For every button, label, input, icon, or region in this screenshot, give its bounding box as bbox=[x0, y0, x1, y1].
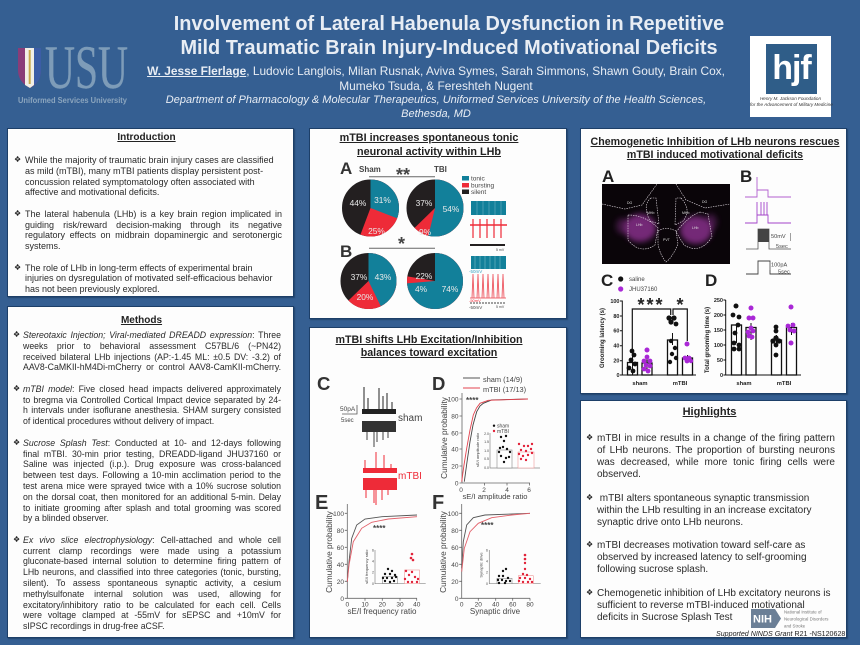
chart D: total grooming time bbox=[705, 298, 801, 387]
chart F inset: Synaptic drive bbox=[478, 552, 484, 578]
legend: silent bbox=[471, 189, 486, 196]
chart C: sham traces: 5sec bbox=[341, 418, 354, 424]
text: methods: silent). To assess spontaneous synaptic activity, a cesium bbox=[23, 578, 281, 588]
logo: NIH: and Stroke bbox=[784, 624, 806, 628]
pie percent labels: 37% bbox=[416, 198, 433, 208]
text: methods: Saline was injected (i.p.). Drug exposure was cross-balanced bbox=[23, 459, 281, 469]
bullets bbox=[586, 433, 593, 597]
chart D inset: 1.5 bbox=[484, 440, 489, 444]
pie percent labels: 25% bbox=[368, 226, 385, 236]
panel letter A: A bbox=[340, 159, 352, 178]
panel: chemogenetic inhibition bbox=[580, 128, 847, 394]
pie percent labels: 74% bbox=[442, 284, 459, 294]
grant note: Supported NINDS Grant R21 -NS120628. bbox=[716, 630, 847, 638]
pie percent labels: 37% bbox=[351, 272, 368, 282]
text: methods: received bilateral LHb injections (AP:-1.45 ML: ±0.5 DV: -3.2) of bbox=[23, 352, 281, 362]
chart F: synaptic drive: 20 bbox=[475, 602, 482, 608]
chart D: amplitude ratio: **** bbox=[466, 396, 479, 405]
text: methods: between test days. Following a 10-min acclimation period to the bbox=[23, 470, 281, 480]
text: methods: of identical procedures without delivery of impact. bbox=[23, 416, 214, 426]
chart D inset: 2.0 bbox=[484, 432, 489, 436]
chart C: grooming latency: sham bbox=[632, 381, 648, 387]
text: introduction bullets: as mild (mTBI), many mTBI patients display persistent post- bbox=[25, 166, 263, 176]
chart E: frequency ratio: sE/I frequency ratio bbox=[348, 607, 417, 616]
chart D: amplitude ratio: 60 bbox=[451, 430, 459, 438]
chart C: sham traces bbox=[340, 387, 422, 447]
chart D: amplitude ratio: Cumulative probability bbox=[439, 396, 449, 479]
text: highlights: Chemogenetic inhibition of LHb excitatory neurons is bbox=[597, 588, 830, 599]
text: methods: were voltage clamped at -55mV for sEPSC and +10mV for bbox=[23, 610, 281, 620]
pie percent labels: 31% bbox=[374, 195, 391, 205]
text: introduction bullets: regulatory effects on midbrain dopaminergic and serotonergic bbox=[25, 230, 282, 240]
text: methods: gluconate-based internal solution to determine firing pattern of bbox=[23, 556, 281, 566]
text: methods: sIPSC recordings in drug-free aCSF. bbox=[23, 621, 165, 631]
title bbox=[174, 13, 724, 59]
panel letters bbox=[601, 167, 752, 290]
chart F: synaptic drive: 80 bbox=[526, 602, 534, 608]
heading: spontaneous tonic activity: neuronal activity within LHb bbox=[357, 146, 501, 158]
text: introduction bullets: concussion related symptomatology often associated with bbox=[25, 176, 255, 186]
text: methods: mTBI model: Five closed head impacts delivered approximately bbox=[23, 384, 281, 394]
legend: tonic bbox=[471, 176, 485, 182]
chart D: total grooming time: 200 bbox=[714, 313, 723, 319]
micrograph: LHb bbox=[636, 223, 642, 227]
chart C: grooming latency: 80 bbox=[613, 314, 620, 320]
authors bbox=[147, 64, 725, 93]
text: methods: final mTBI. 30-min prior testing, DREADD-ligand JHU37160 or bbox=[23, 449, 281, 459]
micrograph: DG bbox=[627, 201, 633, 205]
text: highlights: synaptic drive onto LHb neurons. bbox=[597, 517, 743, 528]
text: introduction bullets: affective and motivational deficits. bbox=[25, 187, 159, 197]
micrograph: MHb bbox=[647, 211, 654, 215]
pie: B TBI bbox=[421, 267, 449, 295]
chart C: sham traces: 50pA bbox=[340, 406, 356, 413]
significance B: * bbox=[398, 234, 405, 254]
text: highlights: observed by increased latency to self-grooming bbox=[597, 552, 807, 563]
panel: spontaneous tonic activity bbox=[309, 128, 567, 319]
text: methods: weeks prior to behavioral assessment C57BL/6 (~PN42) bbox=[23, 341, 281, 351]
significance B bbox=[369, 234, 435, 254]
text: introduction bullets: While the majority of traumatic brain injury cases are classified bbox=[25, 155, 274, 165]
chart D inset: mTBI bbox=[497, 429, 509, 435]
chart E: frequency ratio: 0 bbox=[340, 596, 344, 603]
chart E inset: 6 bbox=[372, 548, 374, 552]
text: highlights bbox=[597, 433, 835, 623]
text: highlights: deficits in Sucrose Splash Test bbox=[597, 612, 732, 623]
affiliation bbox=[166, 94, 706, 120]
bullets: ❖ bbox=[13, 384, 20, 393]
text: introduction bullets: systems. bbox=[25, 241, 61, 251]
chart F inset: 0 bbox=[486, 582, 488, 586]
panel letters: D bbox=[432, 373, 445, 394]
traces B bbox=[745, 177, 791, 276]
text: methods: to initiate grooming after splash and total grooming was scored bbox=[23, 502, 281, 512]
affiliation: Bethesda, MD bbox=[401, 108, 471, 120]
heading: introduction: Introduction bbox=[117, 132, 176, 143]
chart E inset: 0 bbox=[372, 582, 374, 586]
micrograph: DG bbox=[702, 200, 708, 204]
bullets: ❖ bbox=[14, 262, 21, 272]
legend bbox=[462, 176, 495, 196]
chart E: frequency ratio: 40 bbox=[337, 562, 344, 569]
title: Mild Traumatic Brain Injury-Induced Motivational Deficits bbox=[180, 37, 718, 59]
legend: bursting bbox=[471, 182, 495, 190]
bullets: ❖ bbox=[586, 540, 593, 549]
significance A: ** bbox=[396, 165, 410, 185]
chart D: amplitude ratio: 0 bbox=[455, 480, 459, 488]
chart F: synaptic drive: Synaptic drive bbox=[470, 607, 521, 616]
bullets: ❖ bbox=[14, 155, 21, 164]
heading: excitation inhibition: mTBI shifts LHb Excitation/Inhibition bbox=[335, 334, 523, 346]
heading: excitation inhibition bbox=[335, 334, 523, 359]
legend C: saline bbox=[629, 277, 645, 283]
traces: B: -50mV bbox=[469, 305, 482, 310]
text: introduction bullets: has not been previously explored. bbox=[25, 284, 160, 294]
bullets: ❖ bbox=[586, 493, 593, 502]
significance A bbox=[369, 165, 435, 185]
panel letters: A bbox=[602, 167, 614, 186]
pie: B sham bbox=[354, 267, 382, 295]
panel: introduction bbox=[7, 128, 294, 297]
pie percent labels: 44% bbox=[350, 198, 367, 208]
pie: A TBI bbox=[421, 194, 449, 222]
logo: NIH: Neurological Disorders bbox=[784, 616, 829, 622]
micrograph: MHb bbox=[682, 211, 689, 215]
heading: excitation inhibition: balances toward excitation bbox=[361, 347, 497, 359]
chart F: synaptic drive: **** bbox=[481, 521, 494, 530]
heading: chemogenetic inhibition: mTBI induced motivational deficits bbox=[627, 149, 803, 161]
pie percent labels: 4% bbox=[415, 284, 428, 294]
header: title and authors bbox=[147, 13, 725, 120]
chart D: amplitude ratio: 0 bbox=[459, 487, 463, 494]
text: methods: AAV8-CaMKII-hM4Di-mCherry or control AAV8-CamKII-mCherry. bbox=[23, 362, 281, 372]
text: highlights: was decreased, while more tonic firing cells were bbox=[597, 457, 835, 468]
chart C: grooming latency: mTBI bbox=[673, 381, 688, 387]
text: methods: Ex vivo slice electrophysiology: Cell-attached and whole cell bbox=[23, 535, 281, 545]
chart F: synaptic drive: 20 bbox=[451, 579, 459, 586]
chart C: grooming latency: 20 bbox=[613, 359, 620, 365]
chart F: synaptic drive: 40 bbox=[492, 602, 500, 608]
chart F inset: 4 bbox=[486, 560, 488, 564]
micrograph: PVT bbox=[663, 238, 671, 242]
chart F: synaptic drive: 60 bbox=[451, 545, 459, 552]
text: methods: LHb neurons, and classified into three categories (tonic, bursting, bbox=[23, 567, 281, 577]
chart D: amplitude ratio: 6 bbox=[527, 487, 531, 494]
chart F: synaptic drive: 60 bbox=[509, 602, 517, 608]
chart E: frequency ratio: 10 bbox=[361, 602, 369, 608]
chart D: total grooming time: 100 bbox=[714, 343, 723, 349]
chart D: amplitude ratio: 100 bbox=[448, 396, 459, 404]
legend C bbox=[618, 276, 658, 293]
text: methods: Sucrose Splash Test: Conducted at 10- and 12-days following bbox=[23, 438, 281, 448]
affiliation: Department of Pharmacology & Molecular Therapeutics, Uniformed Services University of the Health Sciences, bbox=[166, 94, 706, 106]
micrograph bbox=[602, 184, 730, 264]
chart F: synaptic drive: 100 bbox=[448, 511, 459, 518]
text: methods: h intervals under isoflurane anesthesia. SHAM surgery consisted bbox=[23, 405, 281, 415]
bullets: ❖ bbox=[13, 330, 20, 339]
text: highlights: mTBI in mice results in a change of the firing pattern bbox=[597, 433, 835, 444]
traces: B: -50mV bbox=[469, 269, 482, 274]
chart C: grooming latency: 60 bbox=[613, 329, 620, 335]
chart D: amplitude ratio: 2 bbox=[482, 487, 486, 494]
logo: HJF: hjf bbox=[772, 49, 811, 87]
text: introduction bullets: injuries on dysregulation of motivated self-efficacious behavior bbox=[25, 273, 272, 283]
chart C: grooming latency: *** bbox=[637, 295, 665, 315]
logo: NIH bbox=[751, 609, 829, 628]
chart E: frequency ratio: 30 bbox=[396, 602, 404, 608]
chart C: mTBI traces: mTBI bbox=[398, 471, 422, 482]
panel letters: E bbox=[315, 492, 328, 514]
chart F: synaptic drive: Cumulative probability bbox=[438, 510, 448, 593]
chart E: frequency ratio bbox=[324, 504, 421, 616]
chart D inset bbox=[475, 424, 540, 470]
heading: chemogenetic inhibition: Chemogenetic Inhibition of LHb neurons rescues bbox=[591, 136, 839, 148]
chart C: grooming latency: 40 bbox=[613, 344, 620, 350]
logo: HJF bbox=[750, 36, 831, 117]
chart F: synaptic drive: 80 bbox=[451, 528, 459, 535]
text: introduction bullets bbox=[25, 155, 282, 294]
panel letters: D bbox=[705, 271, 717, 290]
pie: A sham bbox=[356, 194, 385, 222]
panel letters: B bbox=[740, 167, 752, 186]
chart D: amplitude ratio: 20 bbox=[451, 464, 459, 470]
logo: HJF: for the Advancement of Military Medicine bbox=[750, 102, 833, 107]
heading: methods: Methods bbox=[121, 315, 162, 326]
text: methods: excitatory/inhibitory ratio to be calculated for each cell. Cells bbox=[23, 600, 281, 610]
chart C: grooming latency: 100 bbox=[610, 299, 620, 305]
group labels: TBI bbox=[434, 165, 447, 174]
chart E: frequency ratio: 60 bbox=[337, 545, 344, 552]
bullets: ❖ bbox=[586, 588, 593, 597]
heading: chemogenetic inhibition bbox=[590, 136, 840, 161]
text: methods: current clamp recordings were made using a potassium bbox=[23, 546, 281, 556]
logo: NIH: National Institute of bbox=[784, 610, 822, 614]
heading: spontaneous tonic activity bbox=[340, 132, 518, 158]
text: methods: methylsulfonate internal solution was used, allowing for bbox=[23, 589, 281, 599]
chart D inset: 0.0 bbox=[484, 466, 489, 470]
chart C: grooming latency bbox=[600, 295, 696, 387]
panel letter B: B bbox=[340, 242, 352, 261]
chart D: total grooming time: sham bbox=[736, 381, 752, 387]
chart F inset bbox=[478, 548, 541, 586]
authors: Mumeko Tsuda, & Fereshteh Nugent bbox=[339, 79, 533, 93]
chart E inset: 2 bbox=[372, 570, 374, 574]
bullets: ❖ bbox=[13, 535, 20, 544]
chart C: grooming latency: * bbox=[676, 295, 684, 315]
micrograph: LHb bbox=[692, 226, 698, 230]
chart E: frequency ratio: 80 bbox=[337, 528, 344, 535]
chart C: mTBI traces bbox=[363, 452, 422, 505]
chart E: frequency ratio: Cumulative probability bbox=[324, 510, 334, 593]
panel letters: C bbox=[601, 271, 613, 290]
chart E: frequency ratio: 20 bbox=[337, 579, 344, 586]
traces B: 5sec bbox=[776, 244, 788, 250]
panel: excitation inhibition balance bbox=[309, 327, 567, 638]
text: highlights: mTBI decreases motivation toward self-care as bbox=[597, 540, 805, 551]
chart E: frequency ratio: 20 bbox=[379, 602, 386, 608]
pie percent labels: 22% bbox=[416, 271, 433, 281]
chart D: amplitude ratio: mTBI (17/13) bbox=[483, 385, 526, 394]
chart F inset: 2 bbox=[486, 570, 488, 574]
heading: highlights: Highlights bbox=[683, 406, 736, 418]
chart D: amplitude ratio bbox=[439, 375, 531, 501]
logo: USU bbox=[18, 42, 128, 105]
panel: methods bbox=[7, 306, 294, 638]
chart F inset: 6 bbox=[486, 548, 488, 552]
pie percent labels: 20% bbox=[357, 292, 374, 302]
traces B: 50mV bbox=[771, 234, 786, 240]
chart F: synaptic drive: 0 bbox=[455, 596, 459, 603]
pie percent labels: 43% bbox=[375, 272, 392, 282]
traces: B: -50mV bbox=[469, 298, 481, 303]
panel: highlights bbox=[580, 400, 847, 638]
chart D inset: sE/I amplitude ratio bbox=[475, 432, 480, 467]
bullets: ❖ bbox=[13, 438, 20, 447]
text: highlights: mTBI alters spontaneous synaptic transmission bbox=[600, 493, 809, 504]
group labels bbox=[359, 165, 447, 174]
authors: W. Jesse Flerlage, Ludovic Langlois, Milan Rusnak, Aviva Symes, Sarah Simmons, Shawn Gouty, Brain Cox, bbox=[147, 64, 725, 78]
text: methods bbox=[23, 330, 281, 631]
chart C: sham traces: sham bbox=[398, 413, 422, 424]
text: introduction bullets: The lateral habenula (LHb) is a key brain region implicated in bbox=[25, 209, 282, 219]
text: highlights: sufficient to reverse mTBI-induced motivational bbox=[597, 600, 805, 611]
chart C: grooming latency: Grooming latency (s) bbox=[600, 308, 606, 368]
text: methods: on the dorsal coat, then monitored for an additional 5-min. Delay bbox=[23, 492, 281, 502]
logo: NIH: NIH bbox=[753, 614, 772, 626]
chart E inset bbox=[364, 548, 426, 586]
group labels: Sham bbox=[359, 165, 381, 174]
chart C: grooming latency: 0 bbox=[616, 373, 620, 379]
logo: HJF: Henry M. Jackson Foundation bbox=[760, 96, 821, 101]
text: highlights: of LHb neurons. The proportion of bursting neurons bbox=[597, 445, 835, 456]
pie percent labels bbox=[350, 195, 460, 302]
chart F: synaptic drive: 40 bbox=[451, 562, 459, 569]
traces: A bbox=[470, 201, 507, 252]
bullets: ❖ bbox=[14, 209, 21, 218]
text: highlights: within the LHb resulting in an increase excitatory bbox=[597, 505, 812, 516]
traces: B bbox=[469, 256, 506, 310]
chart E inset: sE/I frequency ratio bbox=[364, 549, 369, 584]
chart D: total grooming time: Total grooming time (s) bbox=[705, 307, 711, 373]
traces: A: 5 mV bbox=[496, 248, 505, 252]
chart E: frequency ratio: 40 bbox=[413, 602, 421, 608]
traces: B: 5 mV bbox=[496, 305, 505, 309]
chart D: total grooming time: 0 bbox=[720, 373, 723, 379]
pie percent labels: 9% bbox=[419, 227, 432, 237]
title: Involvement of Lateral Habenula Dysfunction in Repetitive bbox=[174, 13, 724, 35]
text: methods: Stereotaxic Injection; Viral-mediated DREADD expression: Three bbox=[23, 330, 281, 340]
traces B: 100pA bbox=[771, 262, 787, 268]
bullets bbox=[14, 155, 21, 272]
chart D: total grooming time: 150 bbox=[714, 328, 723, 334]
text: highlights: following sucrose splash. bbox=[597, 564, 708, 575]
panel letters bbox=[315, 373, 445, 514]
chart D inset: sham bbox=[497, 424, 509, 430]
chart E: frequency ratio: 0 bbox=[345, 602, 349, 608]
text: introduction bullets: guiding risk/reward decision-making through its negative bbox=[25, 220, 282, 230]
chart D: total grooming time: 50 bbox=[717, 358, 723, 364]
chart F: synaptic drive bbox=[438, 504, 534, 616]
pie percent labels: 54% bbox=[443, 204, 460, 214]
chart D: amplitude ratio: 40 bbox=[451, 446, 459, 454]
panel letters: F bbox=[432, 492, 444, 514]
chart D: amplitude ratio: sham (14/9) bbox=[483, 375, 522, 384]
text: methods: test arena mice were sprayed twice with a 10% sucrose solution bbox=[23, 481, 281, 491]
chart D: total grooming time: 250 bbox=[714, 298, 723, 304]
chart D: total grooming time: mTBI bbox=[777, 381, 792, 387]
chart E inset: 4 bbox=[372, 560, 374, 564]
bullets: ❖ bbox=[586, 433, 593, 442]
chart F: synaptic drive: 0 bbox=[460, 602, 464, 608]
chart E: frequency ratio: 100 bbox=[333, 511, 344, 518]
chart E: frequency ratio: **** bbox=[373, 524, 386, 533]
chart D inset: 0.5 bbox=[484, 457, 489, 461]
chart D: amplitude ratio: sE/I amplitude ratio bbox=[462, 492, 528, 501]
heading: spontaneous tonic activity: mTBI increases spontaneous tonic bbox=[340, 132, 518, 144]
traces B: 5sec bbox=[778, 270, 790, 276]
chart D: amplitude ratio: 80 bbox=[451, 414, 459, 420]
text: introduction bullets: The role of LHb in long-term effects of experimental brain bbox=[25, 262, 252, 272]
legend C: JHU37160 bbox=[629, 287, 658, 293]
text: methods: by a blinded observer. bbox=[23, 513, 109, 523]
bullets bbox=[13, 330, 20, 544]
panel letters: C bbox=[317, 373, 330, 394]
text: highlights: observed. bbox=[597, 469, 641, 480]
chart D: amplitude ratio: 4 bbox=[505, 487, 509, 494]
chart D inset: 1.0 bbox=[484, 449, 489, 453]
text: methods: to bregma via Controlled Cortical Impact device separated by 24- bbox=[23, 395, 281, 405]
